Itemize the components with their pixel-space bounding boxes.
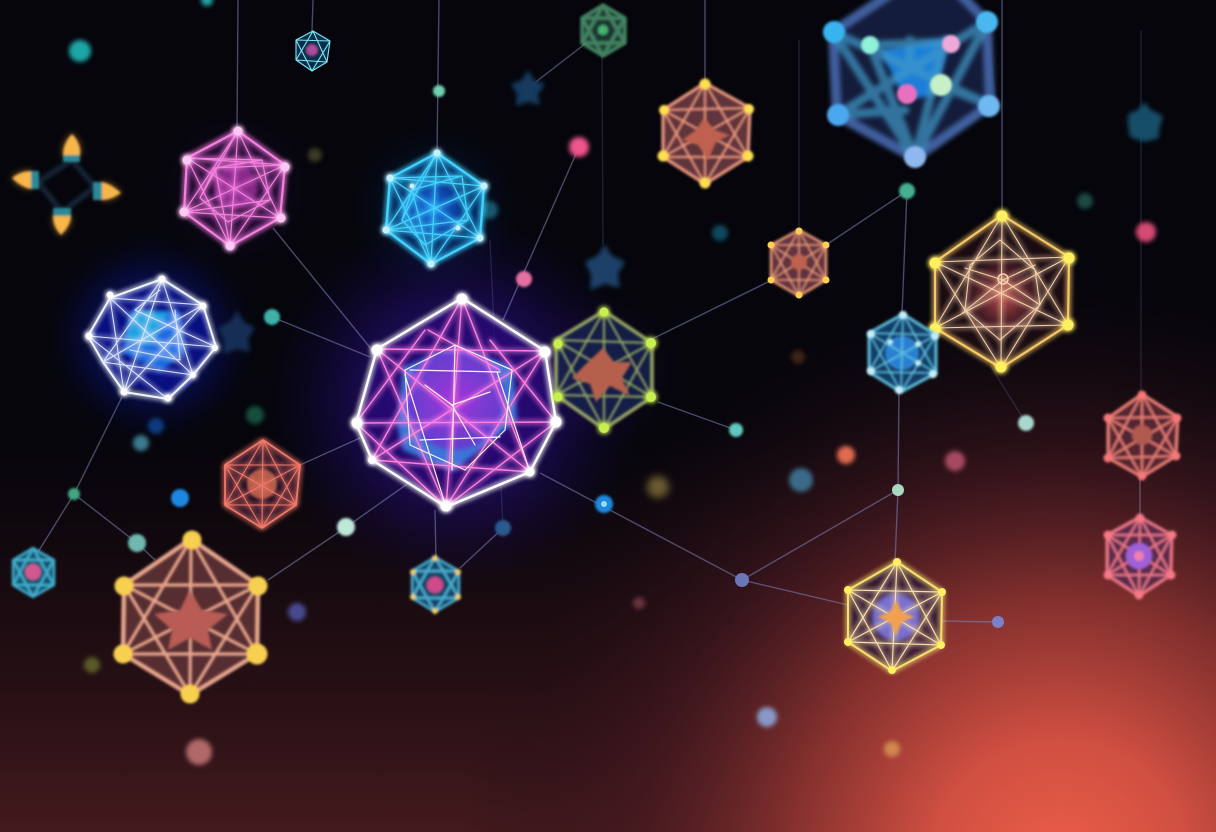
polyhedron: yellow right	[930, 210, 1074, 372]
polyhedron: small cyan, far left	[13, 548, 54, 597]
polyhedron: small orange centre right	[768, 228, 830, 298]
polyhedron: large blurred blue, top right	[823, 0, 1000, 168]
polyhedron: large orange, lower left	[114, 530, 268, 704]
polyhedron: red, far right	[1104, 390, 1182, 480]
polyhedron: cyan upper centre	[382, 150, 488, 268]
polyhedron: small cyan, bottom centre	[410, 555, 461, 614]
polyhedron: orange top	[658, 78, 754, 188]
polyhedra: blurred blue stars in the distance	[218, 70, 1163, 354]
polyhedron: yellow and violet, lower right	[844, 558, 946, 674]
polyhedron: pink, far right	[1104, 514, 1176, 600]
connector lines	[38, 0, 1141, 622]
polyhedron: small blue centre right	[867, 311, 939, 394]
polyhedron: green and orange	[554, 308, 656, 433]
polyhedron: small cyan top	[296, 31, 330, 71]
polyhedron: white and blue, left	[86, 276, 218, 402]
polyhedron: blurred green top	[582, 5, 625, 56]
polyhedron: red small, left centre	[225, 440, 300, 528]
icon: blurred four-point star, upper left	[12, 134, 121, 235]
polyhedron: magenta upper left	[180, 126, 290, 250]
polyhedron: large central magenta and violet	[352, 294, 562, 512]
